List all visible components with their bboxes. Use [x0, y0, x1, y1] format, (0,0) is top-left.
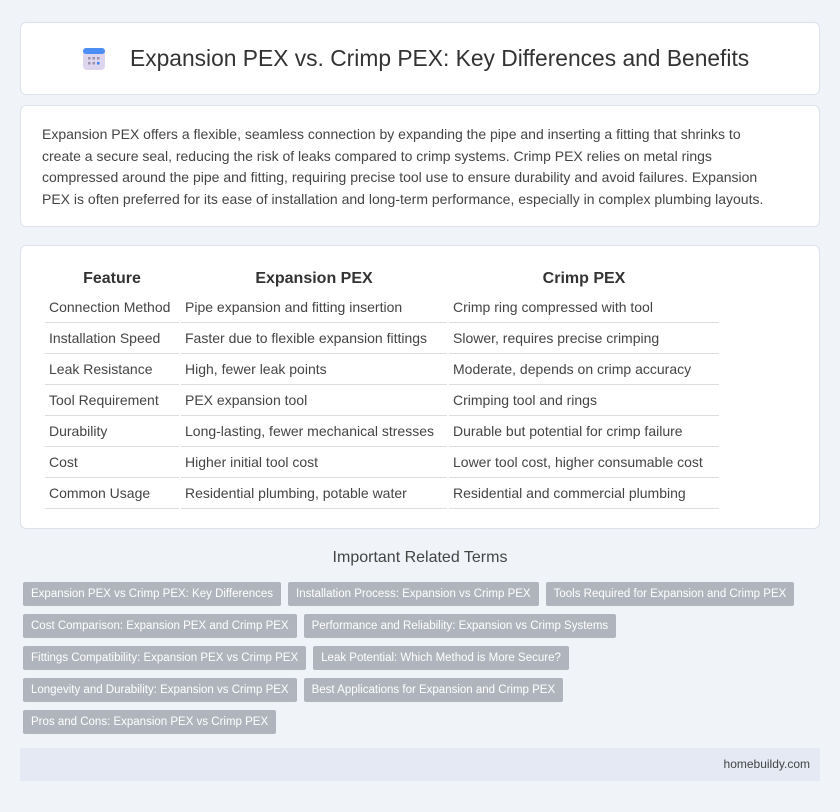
tags: Performance and Reliability: Expansion vs Crimp Systems [312, 620, 608, 632]
comparison table: Expansion PEX [255, 270, 373, 287]
tags: Pros and Cons: Expansion PEX vs Crimp PEX [31, 716, 268, 728]
comparison table: Connection Method [49, 299, 170, 315]
comparison table: PEX expansion tool [185, 392, 307, 408]
comparison table: Higher initial tool cost [185, 454, 318, 470]
comparison table: Moderate, depends on crimp accuracy [453, 361, 691, 377]
title: Expansion PEX vs. Crimp PEX: Key Differences and Benefits [130, 45, 749, 71]
comparison table: Crimp ring compressed with tool [453, 299, 653, 315]
comparison table: Durability [49, 423, 107, 439]
comparison table: Durable but potential for crimp failure [453, 423, 683, 439]
tags: Cost Comparison: Expansion PEX and Crimp PEX [31, 620, 289, 632]
intro text: Expansion PEX offers a flexible, seamless connection by expanding the pipe and inserting a fitting that shrinks to create a secure seal, reducing the risk of leaks compared to crimp systems. Crimp PEX relies on metal rings compressed around the pipe and fitting, requiring precise tool use to ensure durability and avoid failures. Expansion PEX is often preferred for its ease of installation and long-term performance, especially in complex plumbing layouts. [42, 126, 763, 206]
comparison table: Residential plumbing, potable water [185, 485, 407, 501]
comparison table: Long-lasting, fewer mechanical stresses [185, 423, 434, 439]
comparison table: Leak Resistance [49, 361, 153, 377]
comparison table: Cost [49, 454, 78, 470]
comparison table: Pipe expansion and fitting insertion [185, 299, 402, 315]
comparison table: High, fewer leak points [185, 361, 327, 377]
related terms heading: Important Related Terms [333, 549, 507, 566]
footer: homebuildy.com [724, 757, 810, 771]
tags: Fittings Compatibility: Expansion PEX vs Crimp PEX [31, 652, 298, 664]
comparison table: Slower, requires precise crimping [453, 330, 659, 346]
tags [23, 582, 794, 734]
comparison table: Tool Requirement [49, 392, 159, 408]
comparison table: Feature [83, 270, 141, 287]
footer [20, 748, 820, 781]
comparison table: Lower tool cost, higher consumable cost [453, 454, 703, 470]
comparison table: Installation Speed [49, 330, 160, 346]
tags: Tools Required for Expansion and Crimp PEX [554, 588, 786, 600]
comparison table: Faster due to flexible expansion fittings [185, 330, 427, 346]
tags: Longevity and Durability: Expansion vs Crimp PEX [31, 684, 289, 696]
icon: calendar [83, 48, 105, 70]
comparison table: Crimp PEX [543, 270, 625, 287]
intro text [20, 105, 820, 227]
comparison table: Common Usage [49, 485, 150, 501]
tags: Expansion PEX vs Crimp PEX: Key Differences [31, 588, 273, 600]
tags: Leak Potential: Which Method is More Secure? [321, 652, 561, 664]
comparison table: Residential and commercial plumbing [453, 485, 686, 501]
tags: Installation Process: Expansion vs Crimp PEX [296, 588, 531, 600]
comparison table [20, 245, 820, 529]
tags: Best Applications for Expansion and Crimp PEX [312, 684, 555, 696]
header card [20, 22, 820, 95]
comparison table: Crimping tool and rings [453, 392, 597, 408]
